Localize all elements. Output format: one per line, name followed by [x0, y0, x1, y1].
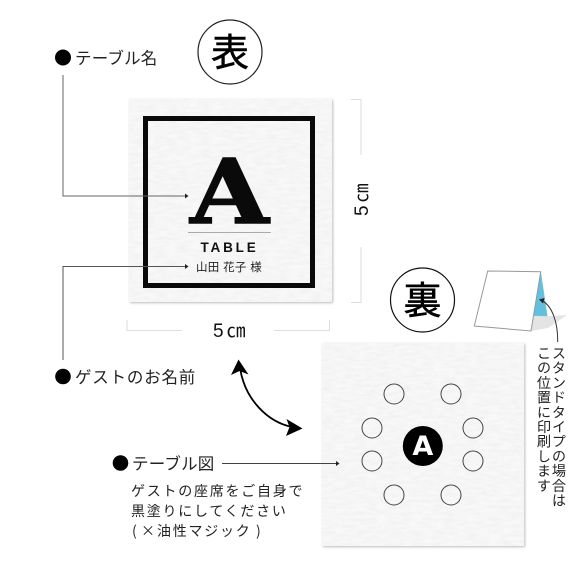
description text: ×: [141, 521, 157, 541]
card frame: [146, 118, 312, 286]
description text: 油性マジック: [157, 521, 252, 541]
dimension: width: [127, 316, 330, 343]
note: stand type: [535, 346, 566, 508]
dimension: height: ㎝: [347, 183, 374, 202]
label: table name: テーブル名: [75, 48, 158, 68]
double-headed curved arrow: [231, 360, 302, 436]
leader arrow: guest name: [63, 264, 188, 360]
note: stand type: この位置に印刷します: [535, 346, 551, 493]
guest name: 山田 花子 様: [196, 260, 262, 274]
icon: standing tent card: [474, 271, 567, 331]
centre table badge: A: [412, 431, 433, 462]
centre table badge: [403, 426, 443, 466]
description text: [131, 483, 304, 541]
heading: front: [198, 20, 262, 84]
description text: ゲストの座席をご自身で: [131, 483, 304, 499]
seat circles: [362, 384, 483, 505]
dimension: width: 5: [213, 321, 224, 342]
description text: 黒塗りにしてください: [131, 503, 288, 519]
dimension: height: 5: [352, 205, 373, 216]
label: table diagram: テーブル図: [132, 454, 215, 474]
heading: back: [390, 268, 454, 332]
heading: front: 表: [211, 33, 249, 75]
heading: back: 裏: [403, 281, 442, 323]
label: guest name: ゲストのお名前: [75, 368, 196, 387]
description text: ): [256, 521, 262, 541]
rule: [188, 232, 271, 233]
big letter A: A: [189, 139, 271, 244]
dimension: height: [347, 100, 374, 302]
panel: back card: [322, 343, 525, 547]
description text: (: [132, 521, 138, 541]
dimension: width: ㎝: [226, 316, 246, 343]
label TABLE: TABLE: [200, 240, 258, 255]
panel: front card: [129, 99, 333, 303]
leader arrow: table diagram: [222, 461, 340, 466]
leader arrow: table name: [63, 75, 188, 198]
note: stand type: スタンドタイプの場合は: [550, 346, 566, 508]
pointer arrow: print position: [539, 298, 558, 342]
